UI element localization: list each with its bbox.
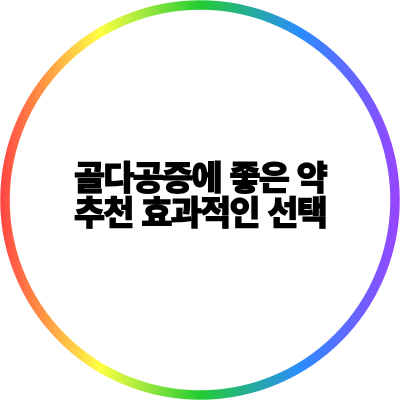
title: 골다공증에 좋은 약 [74, 160, 326, 198]
title: 추천 효과적인 선택 [74, 195, 326, 233]
title [74, 160, 328, 233]
